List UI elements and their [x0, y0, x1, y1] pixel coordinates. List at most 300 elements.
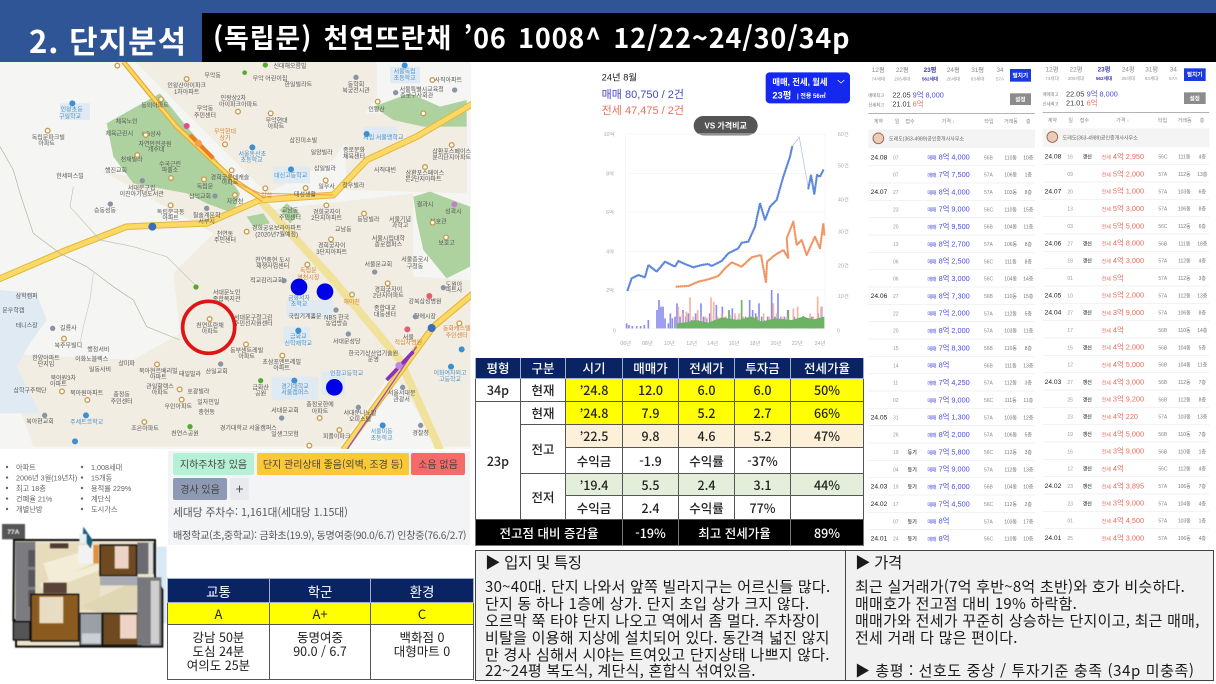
map place labels: 적교감리교회: [250, 277, 283, 285]
price trend chart: [602, 72, 850, 347]
table: deal history summary: 전세가율: [804, 358, 850, 377]
jeonse rows: 16: [1067, 155, 1073, 161]
sale rows: 매매 7억 9,500: [927, 222, 970, 231]
map place labels: 과학고: [392, 222, 409, 230]
map place labels: 초등학교: [394, 74, 416, 82]
sale rows: 24.07: [871, 189, 888, 196]
column headers: 일: [1068, 117, 1073, 124]
jeonse rows: 전세 4억 2,000: [1102, 343, 1144, 352]
jeonse rows: 56B: [1158, 328, 1168, 334]
time axis: 20년: [771, 339, 782, 347]
map place labels: 주민센터: [194, 111, 216, 119]
jeonse rows: 57A: [1158, 311, 1168, 317]
map place labels: 인왕산아이파크: [167, 81, 206, 89]
jeonse rows: 전세 5억: [1102, 273, 1124, 282]
map place labels: 서울동산초: [239, 150, 267, 158]
tag: noise: [411, 453, 465, 475]
map place labels: 서울시립대학: [372, 235, 405, 243]
record highs: 매매최고: [868, 92, 884, 99]
size tabs: 83세대: [971, 76, 985, 83]
map place labels: 일생그모험: [271, 430, 299, 438]
record highs: 6억: [1087, 99, 1097, 108]
record highs: 22.05: [892, 90, 911, 99]
jeonse rows: 14층: [1197, 327, 1208, 334]
jeonse rows: 12: [1067, 467, 1073, 473]
map place labels: 신학재학교: [285, 339, 313, 347]
map place labels: 주민선지원센터: [234, 319, 273, 327]
features text: 만 경사 심해서 시야는 트여있고 단지상태 나쁘지 않다.: [485, 644, 830, 665]
filter button: 매매, 전세, 월세: [772, 77, 828, 87]
map place labels: 서울미동: [371, 427, 393, 435]
sale rows: 13층: [1023, 362, 1034, 369]
jeonse rows: 23: [1067, 415, 1073, 421]
map place labels: 동남빌라: [357, 215, 380, 223]
table: deal history summary: -1.9: [639, 450, 662, 470]
price text: 전세 거래 다 많은 편이다.: [855, 627, 1018, 648]
sale rows: 112동: [1004, 311, 1017, 317]
jeonse rows: 56B: [1158, 241, 1168, 247]
sale rows: 15층: [1023, 206, 1034, 213]
sale rows: 31: [893, 415, 899, 421]
table: location grades: A: [215, 604, 222, 622]
table: location grades: 백화점 0: [400, 627, 444, 646]
sale rows: 매매 8억 4,000: [927, 153, 970, 162]
table: deal history summary: ’19.4: [580, 474, 608, 494]
sale rows: 12층: [1023, 414, 1034, 421]
table: deal history summary: 66%: [814, 403, 840, 422]
sale rows: 매매 7억 5,800: [927, 447, 970, 456]
map place labels: 서울종로시: [401, 256, 429, 264]
sale rows: 07: [893, 173, 899, 179]
sale rows: 56B: [984, 225, 994, 231]
size tabs: 34: [1170, 66, 1177, 73]
sale rows: 57A: [984, 173, 994, 179]
table: deal history summary: 2.4: [642, 498, 660, 516]
jeonse rows: 112동: [1178, 380, 1191, 386]
jeonse rows: 57A: [1158, 207, 1168, 213]
map place labels: 천연동: [217, 230, 234, 238]
jeonse rows: 09: [1067, 172, 1073, 178]
size tabs: 22평: [1070, 64, 1083, 73]
table: deal history summary: 4.6: [698, 426, 716, 445]
map place labels: 국립기계홀문: [288, 313, 322, 321]
green parks: [107, 93, 470, 278]
sale rows: 24: [893, 537, 899, 543]
table: deal history summary: 50%: [814, 380, 840, 399]
map place labels: 삼학캠퍼: [16, 292, 38, 300]
map place labels: 자연안전공원: [138, 140, 172, 148]
jeonse rows: 56C: [1158, 224, 1168, 230]
sale rows: 110동: [1004, 537, 1017, 543]
sale rows: 56C: [984, 277, 994, 283]
map place labels: 금화서자: [288, 294, 311, 302]
map place labels: 적십자병원: [395, 339, 422, 347]
map place labels: 고등학교: [439, 376, 462, 384]
map place labels: 인왕산: [368, 106, 385, 114]
column headers: [1048, 117, 1205, 124]
map place labels: 충현동: [198, 408, 215, 416]
left axis: 8억: [606, 169, 614, 177]
plan badge: [2, 524, 25, 539]
sale rows: 매매 8억 4,000: [927, 187, 970, 196]
sale rows: 매매 8억: [927, 534, 949, 543]
map place labels: 태일빌라: [179, 370, 202, 378]
jeonse rows: 57A: [1158, 259, 1168, 265]
map place labels: 영천시장: [297, 273, 320, 281]
jeonse rows: 24.01: [1045, 535, 1062, 542]
price text: 최근 실거래가(7억 후반~8억 초반)와 호가 비슷하다.: [855, 576, 1185, 597]
sale rows: 10층: [1023, 484, 1034, 491]
map place labels: 아파트: [268, 122, 285, 130]
jeonse rows: 4층: [1199, 154, 1206, 161]
table: location grades: 학군: [308, 580, 332, 600]
map place labels: 일자민일: [197, 398, 219, 406]
map place labels: LG상사: [142, 130, 162, 138]
sale price line: [628, 137, 824, 290]
map place labels: 이화노블렉스: [75, 355, 109, 363]
table: deal history summary: 현재: [531, 403, 554, 422]
table: deal history summary: -19%: [635, 522, 666, 542]
jeonse rows: 전세 4억 4,500: [1102, 516, 1144, 525]
table: deal history summary: 44%: [814, 474, 840, 494]
jeonse rows: 56B: [1158, 380, 1168, 386]
map place labels: 피플이파크: [323, 432, 351, 440]
jeonse rows: 57A: [1158, 276, 1168, 282]
features text: 오르막 쭉 타야 단지 나오고 역에서 좀 멀다. 주차장이: [485, 610, 820, 631]
complex facts list: 건폐율 21%: [16, 495, 53, 504]
sale rows: 15: [893, 346, 899, 352]
jeonse rows: 8층: [1199, 396, 1206, 403]
map place labels: 산일교회: [206, 367, 228, 375]
sale rows: 104동: [1004, 225, 1018, 231]
size tabs: 22평: [896, 65, 909, 74]
jeonse rows: 전세 4억: [1102, 464, 1124, 473]
jeonse rows: 7층: [1199, 379, 1206, 386]
sale rows: 104동: [1004, 277, 1018, 283]
sale rows: 20: [893, 329, 899, 335]
sale rows: 매매 8억 2,000: [927, 430, 970, 439]
record highs: 설정: [1015, 95, 1026, 103]
size tabs: 83세대: [1145, 75, 1159, 82]
sale rows: 56C: [984, 537, 994, 543]
complex facts list: [6, 463, 132, 514]
map place labels: 대동센터: [374, 311, 396, 319]
record highs: 22.05: [1066, 89, 1084, 98]
time axis: 06년: [620, 339, 631, 347]
table: deal history summary: 23p: [487, 450, 509, 470]
column headers: 일: [895, 118, 900, 125]
map place labels: 감삼: [261, 191, 273, 199]
jeonse rows: 16: [1067, 449, 1073, 455]
map place labels: 천재빌라: [121, 156, 143, 164]
map place labels: 시립 서울맹학교: [363, 133, 404, 141]
map place labels: 독립문: [197, 183, 214, 191]
column headers: 가격 ↓: [942, 118, 955, 125]
sale rows: 매매 8억 7,300: [927, 291, 970, 300]
features text: 단지 동 하나 1층에 상가. 단지 초입 상가 크지 않다.: [485, 593, 809, 614]
size tabs: 57A: [996, 77, 1005, 82]
sale rows: 5층: [1025, 310, 1032, 317]
map place labels: 상가: [219, 134, 231, 142]
sale rows: 매매 8억 2,700: [927, 239, 970, 248]
map place labels: 삼일빌라: [314, 165, 337, 173]
map place labels: 아파트: [38, 139, 55, 147]
right axis: 50건: [838, 162, 849, 169]
sale rows: 56B: [984, 363, 994, 369]
map place labels: 경기대학교: [281, 383, 309, 391]
jeonse rows: 전세 3억 9,000: [1102, 499, 1144, 508]
sale rows: 112동: [1004, 450, 1017, 456]
column headers: 타입: [1158, 117, 1167, 124]
map place labels: 상미파: [118, 359, 135, 367]
map place labels: 1차아파트: [174, 88, 200, 96]
agent row: [1043, 128, 1209, 147]
price text: 매매호가 전고점 대비 19% 하락함.: [855, 593, 1077, 614]
title bar: [202, 13, 1216, 62]
jeonse rows: 13: [1067, 207, 1073, 213]
map place labels: 단지입: [38, 360, 54, 368]
left axis: 4억: [606, 247, 614, 255]
map place labels: 강북삼성병원: [408, 297, 442, 305]
jeonse rows: 112동: [1178, 293, 1191, 299]
map place labels: 북궁전시관: [342, 87, 370, 95]
table: deal history summary: 수익금: [577, 450, 611, 470]
table: deal history summary: ’22.5: [580, 426, 608, 445]
sale rows: 103동: [1004, 415, 1018, 421]
sale rows: 8층: [1025, 258, 1032, 265]
map place labels: 아파트: [238, 353, 255, 361]
price summary: 24년 8월: [602, 72, 637, 83]
size tabs: 26세대: [1121, 75, 1135, 82]
map place labels: 인왕초등: [61, 106, 83, 114]
tab button: [1184, 68, 1206, 81]
map place labels: 체육센터: [343, 153, 365, 161]
sale rows: 3층: [1025, 380, 1032, 387]
jeonse rows: 112동: [1178, 276, 1191, 282]
table: deal history summary: ’24.8: [580, 403, 608, 422]
map place labels: 사직대빈: [374, 166, 396, 174]
plan body: [13, 540, 162, 647]
tag: management state: [257, 453, 409, 475]
jeonse rows: 19: [1067, 432, 1073, 438]
size tabs: [871, 65, 1005, 83]
map place labels: 초등학교: [371, 434, 393, 442]
map place labels: 관일할렉스: [146, 383, 174, 391]
sale rows: 24.03: [871, 484, 888, 491]
map place labels: 충정동: [113, 391, 130, 399]
jeonse rows: 갱신: [1083, 431, 1092, 438]
map place labels: 서울기념: [389, 216, 411, 224]
map place labels: 공원: [255, 389, 266, 397]
map place labels: 성곽시: [445, 207, 462, 215]
price text: 매매가와 전세가 꾸준히 상승하는 단지이고, 최근 매매,: [855, 610, 1200, 631]
jeonse rows: 27: [1067, 311, 1073, 317]
price summary: [602, 72, 684, 117]
jeonse rows: 110동: [1178, 432, 1191, 438]
panel: price assessment: [845, 550, 1214, 681]
jeonse rows: 25: [1067, 397, 1073, 403]
sale rows: 15층: [1023, 293, 1034, 300]
map place labels: 2단지아파트: [311, 214, 343, 222]
jeonse rows: 106동: [1178, 484, 1191, 490]
jeonse rows: 4층: [1199, 500, 1206, 507]
panel: complex attributes: [168, 451, 470, 545]
map place labels: 대신고등학교: [274, 172, 308, 180]
tab button: [1010, 69, 1031, 82]
table: deal history summary: 구분: [531, 358, 554, 377]
sale rows: 103동: [1004, 329, 1018, 335]
table: deal history summary: 전저: [531, 486, 554, 506]
record highs: 6억: [913, 100, 923, 109]
table: deal history summary: 6.0: [698, 380, 716, 399]
panel: jeonse transactions list: [1042, 64, 1210, 542]
size tabs: 31평: [1145, 64, 1158, 73]
map place labels: 아파트: [273, 364, 290, 372]
map place labels: 분리단지아파트: [432, 153, 471, 161]
table: deal history summary: 77%: [750, 498, 776, 516]
sale rows: 매매 7억 8,300: [927, 343, 970, 352]
table: deal history summary: 2.7: [754, 403, 772, 422]
features text: [485, 576, 830, 681]
column headers: 계약: [1048, 117, 1057, 124]
left axis: 6억: [606, 208, 614, 216]
sale rows: 14: [893, 363, 899, 369]
jeonse rows: 13층: [1197, 414, 1208, 421]
sale rows: 매매 7억 9,000: [927, 205, 970, 214]
sale rows: 24.05: [871, 414, 888, 421]
compare pill: VS 가격비교: [704, 120, 747, 130]
sale rows: 매매 7억 9,000: [927, 395, 970, 404]
bedroom 1: [100, 545, 137, 576]
title text: (독립문) 천연뜨란채 ’06 1008^ 12/22~24/30/34p: [213, 17, 850, 56]
jeonse rows: 23: [1067, 501, 1073, 507]
jeonse rows: 5층: [1199, 344, 1206, 351]
sale rows: 매매 7억 9,000: [927, 465, 970, 474]
sale rows: 103동: [1004, 519, 1018, 525]
map place labels: 동화캐스텔: [443, 325, 471, 333]
sale rows: 23: [893, 207, 899, 213]
size tabs: [1045, 64, 1178, 82]
sale rows: 57A: [984, 381, 994, 387]
jeonse rows: 106동: [1178, 207, 1191, 213]
map place labels: 서울서대문: [388, 389, 416, 397]
table: deal history summary: 수익률: [689, 450, 724, 470]
map place labels: 사직아파트: [435, 76, 463, 84]
map place labels: 파출소: [162, 166, 179, 174]
jeonse rows: 전세 4억: [1102, 325, 1124, 334]
jeonse rows: 4층: [1199, 258, 1206, 265]
left axis: [604, 130, 616, 335]
map place labels: (2020년7월예정): [255, 231, 298, 239]
jeonse rows: 24.03: [1045, 379, 1062, 386]
map place labels: 천연뜨란채: [196, 321, 224, 329]
left axis: 2억: [606, 286, 614, 294]
map place labels: 교남동: [335, 225, 352, 233]
sale rows: 56C: [984, 259, 994, 265]
jeonse rows: 56B: [1158, 449, 1168, 455]
table: deal history summary: 최고 전세가율: [698, 522, 771, 542]
jeonse rows: 전세 4억 220: [1102, 412, 1138, 421]
size tabs: 23평: [924, 65, 937, 74]
overall verdict: ▶ 총평 : 선호도 중상 / 투자기준 충족 (34p 미충족): [855, 660, 1195, 681]
sale rows: 07: [893, 155, 899, 161]
map place labels: 종합복지관: [213, 295, 241, 303]
map place labels: 서울: [403, 333, 414, 341]
map place labels: 경희궁자이: [375, 286, 402, 294]
map place labels: 일동사비: [89, 365, 111, 373]
complex facts list: 아파트: [16, 463, 36, 472]
jeonse rows: 갱신: [1083, 310, 1092, 317]
agent row: 도레도(363-4989)공인중개사사무소: [889, 135, 964, 142]
map place labels: 길룡사: [60, 324, 77, 332]
right axis: 10건: [838, 293, 849, 300]
map place labels: 오피스텔: [349, 416, 372, 424]
jeonse rows: 104동: [1178, 363, 1191, 369]
table: deal history summary: 6.0: [754, 380, 772, 399]
table: deal history summary: 전고점 대비 증감율: [499, 522, 598, 542]
sale rows: 111동: [1005, 398, 1017, 404]
complex facts list: 최고 18층: [16, 484, 46, 493]
jeonse rows: 56B: [1158, 363, 1168, 369]
jeonse rows: 104동: [1178, 501, 1191, 507]
plan badge: 77A: [7, 529, 20, 536]
jeonse rows: 112동: [1178, 467, 1191, 473]
complex facts list: 계단식: [91, 495, 111, 504]
map place labels: 승동성동: [94, 207, 117, 215]
sale rows: 57A: [984, 190, 994, 196]
map place labels: 아파트: [222, 179, 239, 187]
map place labels: 주민센터: [279, 213, 301, 221]
tag: slope: 경사 있음: [180, 481, 220, 496]
sale rows: [871, 153, 1034, 543]
map place labels: 금화산: [252, 383, 269, 391]
jeonse rows: 57A: [1158, 484, 1168, 490]
table: deal history summary: -37%: [747, 450, 778, 470]
map place labels: 동의아파트: [141, 101, 169, 109]
map place labels: 한국기상산업기술원: [348, 349, 398, 357]
column headers: 거래동: [1004, 118, 1018, 125]
map place labels: 북아현르베리빌: [139, 367, 178, 375]
left axis: 0: [613, 329, 616, 335]
sale rows: 26: [893, 433, 899, 439]
jeonse rows: 6층: [1199, 223, 1206, 230]
table: deal history summary: 5.2: [754, 426, 772, 445]
sale rows: 20: [893, 225, 899, 231]
record highs: 9억 8,000: [913, 90, 944, 99]
map place labels: 본2단지아파트: [405, 175, 442, 183]
sale rows: 10층: [1023, 154, 1034, 161]
jeonse rows: 110동: [1178, 449, 1191, 455]
map place labels: 서울특별시교육청: [400, 86, 444, 94]
jeonse rows: 12: [1067, 363, 1073, 369]
jeonse rows: 03: [1067, 224, 1073, 230]
map place labels: 서울독립: [394, 67, 416, 75]
floor plan 77A: [1, 523, 167, 648]
map place labels: 교남동: [282, 207, 299, 215]
volume bars: [627, 290, 822, 328]
map place labels: 테니스장: [16, 321, 38, 329]
record highs: 매매최고: [1043, 91, 1059, 98]
water and school blocks: [0, 67, 420, 413]
map place labels: 무악 어린이집: [253, 75, 287, 83]
jeonse rows: 57A: [1158, 189, 1168, 195]
bedroom 2: [31, 594, 79, 641]
sale rows: 매매 8억 1,300: [927, 413, 970, 422]
column headers: 접수: [905, 118, 915, 125]
jeonse rows: 111동: [1178, 241, 1191, 247]
sale rows: 13층: [1023, 466, 1034, 473]
grey POI markers: [42, 75, 457, 428]
